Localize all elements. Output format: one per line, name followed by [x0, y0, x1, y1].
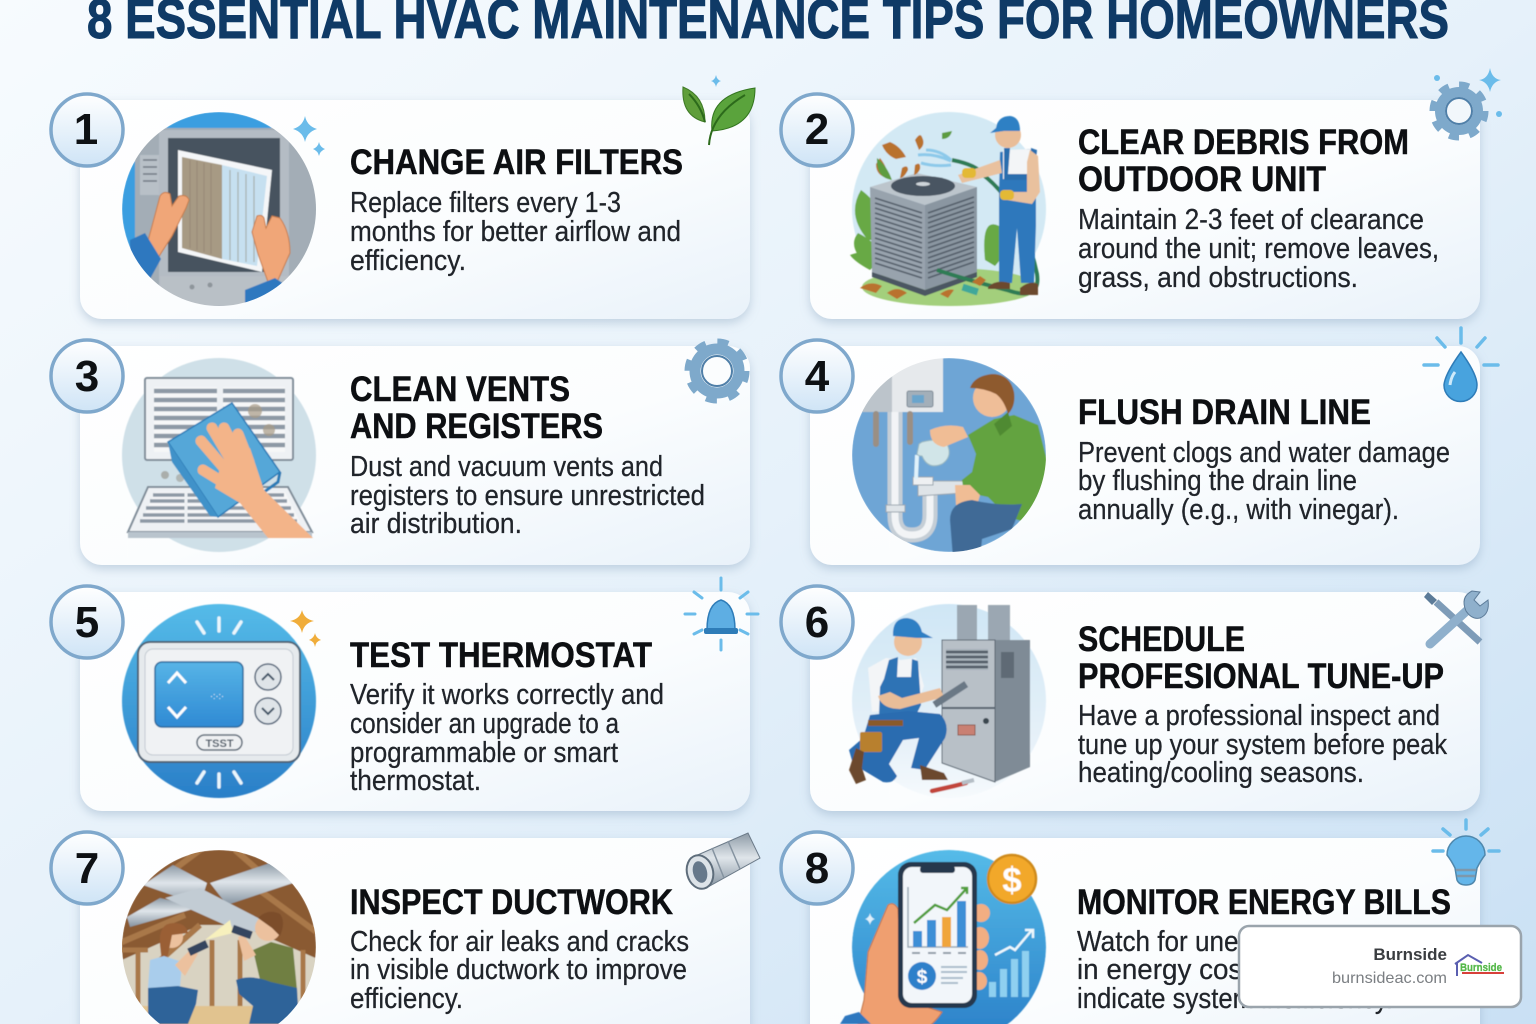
- icon: green leaves: [683, 75, 755, 145]
- body text: Check for air leaks and cracks: [350, 926, 689, 958]
- watermark badge: Burnside: Burnside: [1373, 945, 1447, 964]
- heading: PROFESIONAL TUNE-UP: [1078, 657, 1444, 696]
- watermark badge: Burnside: burnsideac.com: [1332, 970, 1447, 987]
- icon: wrench and screwdriver: [1424, 591, 1488, 644]
- panel: tip 3 clean vents: [51, 340, 750, 565]
- number badge 1: 1: [74, 105, 98, 154]
- heading: OUTDOOR UNIT: [1078, 160, 1326, 199]
- heading: CLEAR DEBRIS FROM: [1078, 123, 1409, 162]
- body text: [1077, 926, 1449, 1015]
- card background: [80, 838, 750, 1024]
- number badge 5: 5: [75, 598, 99, 647]
- number badge 6: [781, 586, 853, 658]
- number badge 4: [781, 340, 853, 412]
- number badge 4: 4: [805, 352, 830, 401]
- body text: Verify it works correctly and: [350, 679, 664, 711]
- number badge 3: [51, 340, 123, 412]
- illustration: man hosing outdoor unit: [850, 112, 1046, 306]
- body text: Have a professional inspect and: [1078, 700, 1440, 732]
- body text: indicate system inefficiency.: [1077, 983, 1393, 1015]
- body text: programmable or smart: [350, 737, 618, 769]
- illustration: two people inspecting attic ducts: [122, 850, 316, 1024]
- body text: [1078, 437, 1450, 526]
- icon: sparkles: [293, 116, 325, 156]
- body text: registers to ensure unrestricted: [350, 480, 705, 512]
- body text: efficiency.: [350, 245, 466, 277]
- heading: [350, 370, 603, 446]
- panel: tip 4 flush drain line: [781, 328, 1498, 571]
- body text: [1078, 700, 1448, 789]
- illustration: phone with energy chart: [840, 850, 1046, 1024]
- heading: AND REGISTERS: [350, 407, 603, 446]
- number badge 8: [781, 832, 853, 904]
- icon: light bulb: [1433, 820, 1499, 885]
- illustration: phone with energy chart: $: [917, 967, 928, 988]
- heading: TEST THERMOSTAT: [350, 636, 652, 675]
- body text: in energy costs, which can: [1077, 954, 1403, 986]
- card background: [810, 100, 1480, 319]
- card background: [80, 100, 750, 319]
- heading: MONITOR ENERGY BILLS: [1077, 883, 1451, 922]
- body text: Replace filters every 1-3: [350, 187, 621, 219]
- heading: SCHEDULE: [1078, 620, 1245, 659]
- panel: tip 6 professional tune-up: [781, 586, 1488, 811]
- body text: grass, and obstructions.: [1078, 262, 1358, 294]
- card background: [80, 346, 750, 565]
- body text: months for better airflow and: [350, 216, 681, 248]
- panel: tip 1 change air filters: [51, 75, 755, 319]
- body text: [350, 926, 689, 1015]
- heading: [1078, 123, 1409, 199]
- illustration: technician at furnace: [849, 604, 1046, 798]
- card background: [80, 592, 750, 811]
- number badge 2: [781, 94, 853, 166]
- panel: tip 5 test thermostat: [51, 578, 758, 811]
- number badge 7: 7: [75, 844, 99, 893]
- logo: Burnside house: Burnside: [1460, 962, 1502, 974]
- heading: CLEAN VENTS: [350, 370, 570, 409]
- card background: [810, 592, 1480, 811]
- card background: [810, 346, 1480, 565]
- illustration: thermostat: TSST: [205, 738, 234, 750]
- logo: Burnside house: [1455, 955, 1504, 976]
- number badge 1: [51, 94, 123, 166]
- body text: in visible ductwork to improve: [350, 954, 687, 986]
- watermark badge: Burnside: [1239, 926, 1521, 1007]
- icon: orange sparkles: [290, 610, 321, 647]
- panel: tip 2 clear debris: [781, 68, 1502, 319]
- heading: CHANGE AIR FILTERS: [350, 143, 683, 182]
- icon: alarm bell: [685, 578, 758, 650]
- body text: tune up your system before peak: [1078, 729, 1448, 761]
- panel: tip 8 monitor energy bills: [781, 820, 1499, 1024]
- body text: Watch for unexpected increases: [1077, 926, 1449, 958]
- number badge 3: 3: [75, 352, 99, 401]
- number badge 5: [51, 586, 123, 658]
- body text: air distribution.: [350, 508, 522, 540]
- illustration: hands changing air filter: [122, 112, 320, 318]
- heading: FLUSH DRAIN LINE: [1078, 393, 1371, 432]
- body text: [1078, 204, 1439, 294]
- body text: consider an upgrade to a: [350, 708, 619, 740]
- icon: gear with sparkle: [1433, 68, 1502, 137]
- illustration: thermostat: ·:·:·: [210, 691, 224, 701]
- body text: around the unit; remove leaves,: [1078, 233, 1439, 265]
- card background: [810, 838, 1480, 1024]
- body text: heating/cooling seasons.: [1078, 757, 1364, 789]
- body text: annually (e.g., with vinegar).: [1078, 494, 1399, 526]
- icon: gear: [688, 342, 746, 400]
- body text: by flushing the drain line: [1078, 465, 1357, 497]
- icon: water drop: [1424, 328, 1498, 402]
- icon: duct section: [683, 833, 760, 892]
- illustration: hand wiping vent: [122, 358, 316, 552]
- body text: thermostat.: [350, 765, 481, 797]
- number badge 7: [51, 832, 123, 904]
- body text: Dust and vacuum vents and: [350, 451, 663, 483]
- panel: tip 7 inspect ductwork: [51, 832, 760, 1024]
- number badge 6: 6: [805, 598, 829, 647]
- body text: [350, 679, 664, 797]
- illustration: phone with energy chart: $: [1002, 861, 1022, 900]
- number badge 2: 2: [805, 105, 829, 154]
- body text: [350, 187, 681, 277]
- body text: Prevent clogs and water damage: [1078, 437, 1450, 469]
- number badge 8: 8: [805, 844, 829, 893]
- body text: efficiency.: [350, 983, 463, 1015]
- heading: INSPECT DUCTWORK: [350, 883, 673, 922]
- illustration: man flushing drain: [852, 358, 1046, 552]
- illustration: thermostat: [122, 604, 316, 798]
- heading: [1078, 620, 1444, 696]
- body text: [350, 451, 705, 540]
- body text: Maintain 2-3 feet of clearance: [1078, 204, 1424, 236]
